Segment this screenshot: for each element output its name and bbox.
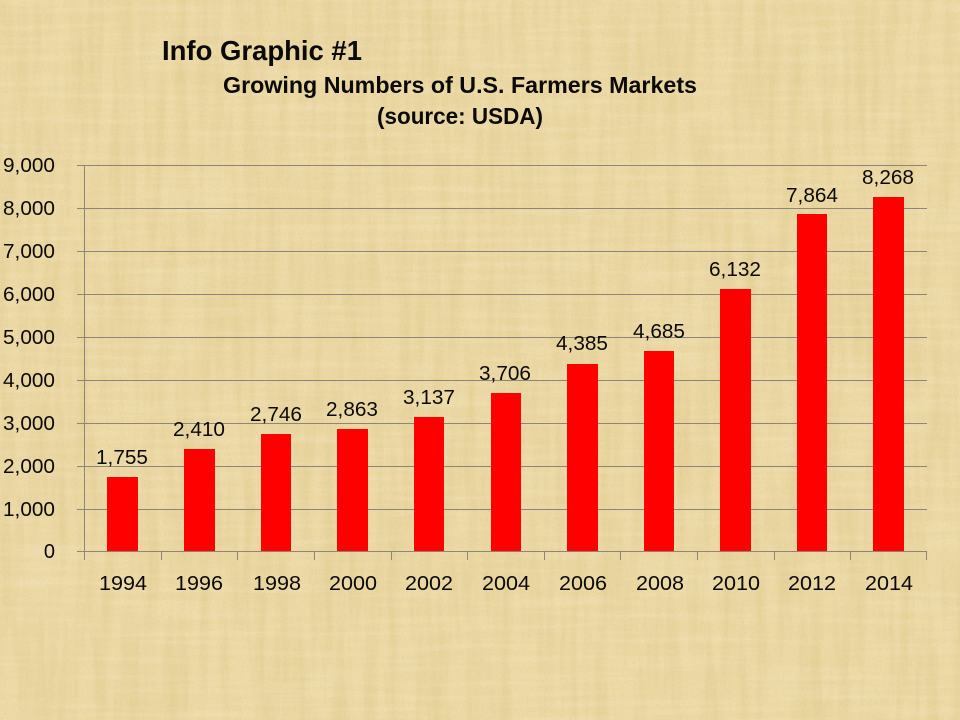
- bars: [107, 197, 904, 551]
- subtitle: Growing Numbers of U.S. Farmers Markets: [223, 72, 697, 98]
- value labels: 2,410: [173, 419, 225, 441]
- value labels: 3,137: [403, 387, 455, 409]
- gridlines and axes: [77, 165, 927, 560]
- value labels: 8,268: [862, 167, 914, 189]
- x-axis labels: 2000: [329, 573, 377, 595]
- x-axis labels: 2008: [636, 573, 684, 595]
- value labels: 2,863: [326, 399, 378, 421]
- bar chart: [3, 155, 927, 595]
- x-axis labels: 2010: [712, 573, 760, 595]
- value labels: 2,746: [250, 404, 302, 426]
- y-axis labels: 9,000: [3, 155, 55, 177]
- y-axis labels: 8,000: [3, 198, 55, 220]
- subtitle: (source: USDA): [377, 103, 543, 129]
- x-axis labels: 1994: [99, 573, 147, 595]
- value labels: 4,385: [556, 333, 608, 355]
- y-axis labels: 6,000: [3, 284, 55, 306]
- x-axis labels: 2012: [788, 573, 836, 595]
- y-axis labels: [3, 155, 55, 563]
- y-axis labels: 1,000: [3, 499, 55, 521]
- x-axis labels: 2004: [482, 573, 530, 595]
- subtitle: [223, 72, 697, 129]
- x-axis labels: 2014: [865, 573, 913, 595]
- y-axis labels: 7,000: [3, 241, 55, 263]
- title: Info Graphic #1: [162, 35, 362, 66]
- x-axis labels: 2006: [559, 573, 607, 595]
- value labels: 7,864: [786, 185, 838, 207]
- value labels: 4,685: [633, 321, 685, 343]
- y-axis labels: 4,000: [3, 370, 55, 392]
- value labels: 6,132: [709, 259, 761, 281]
- y-axis labels: 5,000: [3, 327, 55, 349]
- value labels: 3,706: [479, 363, 531, 385]
- y-axis labels: 3,000: [3, 413, 55, 435]
- value labels: 1,755: [96, 447, 148, 469]
- y-axis labels: 0: [44, 541, 55, 563]
- x-axis labels: 1998: [253, 573, 301, 595]
- x-axis labels: 2002: [405, 573, 453, 595]
- value labels: [96, 167, 914, 469]
- y-axis labels: 2,000: [3, 456, 55, 478]
- x-axis labels: 1996: [175, 573, 223, 595]
- x-axis labels: [99, 573, 913, 595]
